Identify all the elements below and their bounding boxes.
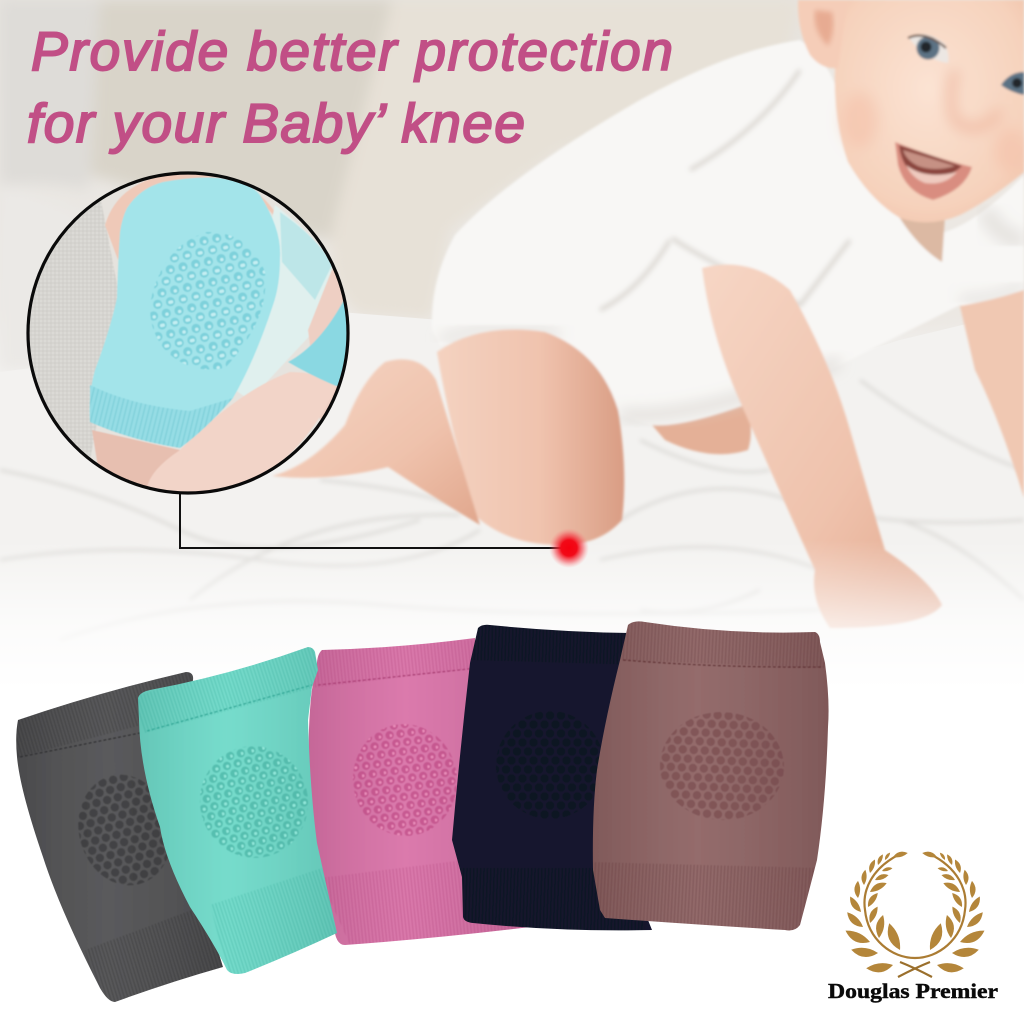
baby foot and lower leg <box>272 359 480 525</box>
far knee <box>652 398 751 454</box>
blanket in lens <box>30 201 118 458</box>
callout leader line <box>180 494 562 548</box>
ear <box>798 0 848 68</box>
cheek and nose shading <box>842 70 1024 172</box>
onesie <box>432 40 1024 425</box>
knee pad sleeve <box>89 177 281 418</box>
fade to white <box>0 540 1024 690</box>
brand name: Douglas Premier <box>828 979 998 1003</box>
head <box>835 0 1024 222</box>
pad ribbed cuff <box>90 385 233 448</box>
background second pad <box>235 205 335 400</box>
onesie shading <box>440 70 1024 415</box>
knee pad: mint <box>138 647 337 974</box>
knee pads row <box>0 615 835 1010</box>
eyes <box>908 34 1024 95</box>
skin lower <box>92 430 180 492</box>
title: Provide better protection <box>31 20 673 82</box>
baby <box>272 0 1024 628</box>
mouth <box>895 142 972 200</box>
logo: Douglas Premier <box>828 850 998 1003</box>
laurel wreath icon <box>843 850 987 977</box>
arm behind pad <box>105 172 282 260</box>
title: for your Baby’ knee <box>27 92 525 154</box>
thigh <box>437 330 624 545</box>
knee pad: gray <box>16 672 223 1002</box>
knee pad: brown <box>585 615 835 935</box>
second cuff <box>288 300 346 386</box>
far arm <box>960 290 1024 498</box>
baby foot in lens <box>148 372 320 492</box>
magnified lens: knee pad close-up <box>20 165 360 505</box>
knee pad: navy <box>445 620 660 935</box>
bed sheet <box>0 310 1024 700</box>
grip dots in lens <box>150 232 266 370</box>
knee pad: pink <box>308 638 528 945</box>
red marker dot on knee <box>549 528 589 568</box>
near arm <box>702 264 942 628</box>
title <box>27 20 673 154</box>
neck <box>895 210 945 262</box>
